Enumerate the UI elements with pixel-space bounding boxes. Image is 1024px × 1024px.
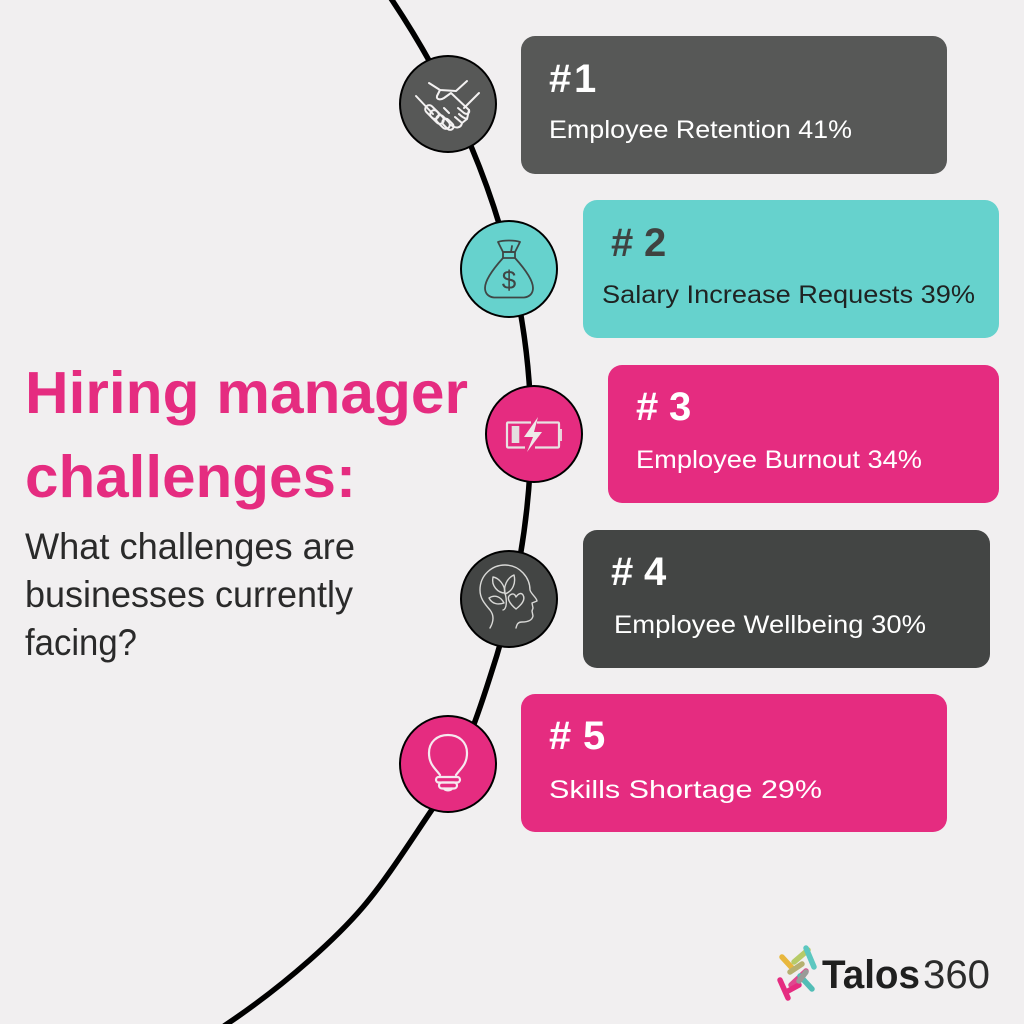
card 5: skills shortage (521, 694, 947, 832)
icon: money bag (461, 221, 557, 317)
card 1: employee retention (521, 36, 947, 174)
card 5: skills shortage: 5 (583, 714, 605, 758)
subtitle: businesses currently (25, 574, 353, 615)
title: Hiring manager (25, 360, 468, 426)
card 5: skills shortage: # (549, 714, 571, 758)
logo wordmark: Talos (822, 953, 920, 997)
subtitle: What challenges are (25, 526, 355, 567)
logo: Talos360 (780, 948, 990, 998)
card 2: salary increase requests (583, 200, 999, 338)
card 4: employee wellbeing: 4 (644, 550, 667, 594)
card 3: employee burnout: # (636, 385, 658, 429)
card 1: employee retention: Employee Retention 41% (549, 116, 852, 144)
timeline arc (224, 0, 531, 1024)
subtitle: facing? (25, 622, 137, 663)
logo mark (780, 948, 814, 998)
card 2: salary increase requests: Salary Increase Requests 39% (602, 281, 975, 309)
card 2: salary increase requests: 2 (644, 221, 666, 265)
card 1: employee retention: 1 (574, 57, 596, 101)
title: challenges: (25, 444, 356, 510)
card 4: employee wellbeing: Employee Wellbeing 30% (614, 611, 926, 639)
card 3: employee burnout (608, 365, 999, 503)
card 3: employee burnout: 3 (669, 385, 691, 429)
card 3: employee burnout: Employee Burnout 34% (636, 446, 922, 474)
icon: low battery (486, 386, 582, 482)
card 4: employee wellbeing: # (611, 550, 633, 594)
icon: light bulb (400, 716, 496, 812)
icon: mind with leaves and heart (461, 551, 557, 647)
subtitle (25, 526, 355, 663)
card 1: employee retention: # (549, 57, 571, 101)
icon: handshake (400, 56, 496, 152)
card 5: skills shortage: Skills Shortage 29% (549, 776, 822, 804)
logo: Talos360: 360 (923, 953, 990, 997)
card 2: salary increase requests: # (611, 221, 633, 265)
card 4: employee wellbeing (583, 530, 990, 668)
title (25, 360, 468, 510)
icon: money bag: $ (502, 265, 517, 295)
